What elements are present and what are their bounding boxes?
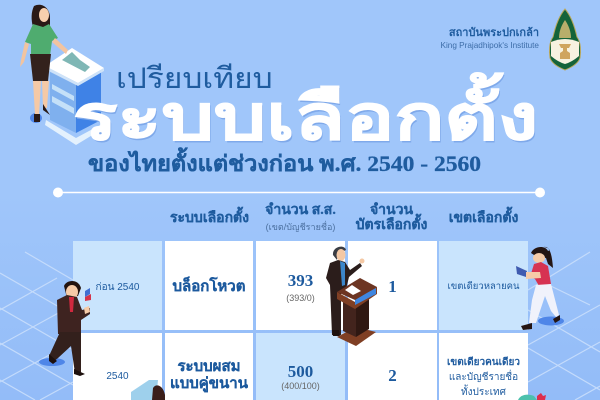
- column header: number of ballots: บัตรเลือกตั้ง: [356, 218, 427, 233]
- icon: businessman with flag: [39, 281, 91, 376]
- institute name: King Prajadhipok's Institute: [440, 41, 539, 50]
- cell: block vote: บล็อกโหวต: [173, 279, 245, 295]
- cell: block vote: [165, 241, 253, 330]
- column header: number of MPs: จำนวน ส.ส.: [265, 203, 336, 218]
- icon: voter at bottom: [131, 380, 165, 400]
- column header: electoral system: ระบบเลือกตั้ง: [170, 211, 249, 226]
- cell: before 2540: ก่อน 2540: [96, 282, 139, 293]
- cell: 500 MPs: (400/100): [281, 381, 320, 391]
- cell: single-member and party list: ทั้งประเทศ: [461, 387, 506, 398]
- column header: number of MPs: (เขต/บัญชีรายชื่อ): [266, 222, 335, 232]
- cell: 2540: 2540: [106, 371, 129, 382]
- cell: mixed parallel system: ระบบผสม: [178, 359, 240, 375]
- column header: number of MPs: [265, 202, 336, 232]
- title: main heading: ระบบเลือกตั้ง: [73, 85, 538, 153]
- cell: 500 MPs: 500: [288, 362, 313, 381]
- cell: mixed parallel system: แบบคู่ขนาน: [170, 376, 248, 392]
- cell: single-member and party list: [439, 333, 528, 400]
- column header: number of ballots: จำนวน: [370, 203, 413, 218]
- institute name: [440, 26, 539, 50]
- cell: 500 MPs: [256, 333, 345, 400]
- cell: before 2540: [73, 241, 162, 330]
- cell: multi-member constituency: เขตเดียวหลายคน: [447, 281, 520, 292]
- icon: woman voting at ballot box: [20, 5, 104, 145]
- cell: 393 MPs: 393: [288, 271, 313, 290]
- cell: single-member and party list: เขตเดียวคนเดียว: [447, 357, 520, 368]
- cell: 1 ballot: [348, 241, 437, 330]
- cell: 2540: [73, 333, 162, 400]
- cell: 393 MPs: [256, 241, 345, 330]
- subtitle: ของไทยตั้งแต่ช่วงก่อน พ.ศ. 2540 - 2560: [88, 151, 481, 176]
- title: small heading: เปรียบเทียบ: [116, 63, 273, 95]
- cell: 1 ballot: 1: [388, 277, 397, 296]
- cell: 2 ballots: 2: [388, 366, 397, 385]
- icon: woman reading a clipboard: [516, 247, 564, 330]
- cell: 2 ballots: [348, 333, 437, 400]
- column header: constituency: เขตเลือกตั้ง: [449, 211, 518, 226]
- cell: multi-member constituency: [439, 241, 528, 330]
- cell: 393 MPs: (393/0): [286, 293, 315, 303]
- icon: speaker at podium: [326, 247, 377, 346]
- cell: mixed parallel system: [165, 333, 253, 400]
- cell: single-member and party list: และบัญชีรายชื่อ: [449, 372, 518, 383]
- column header: number of ballots: [356, 202, 427, 233]
- icon: figure at bottom right: [518, 393, 546, 400]
- institute name: สถาบันพระปกเกล้า: [449, 27, 539, 39]
